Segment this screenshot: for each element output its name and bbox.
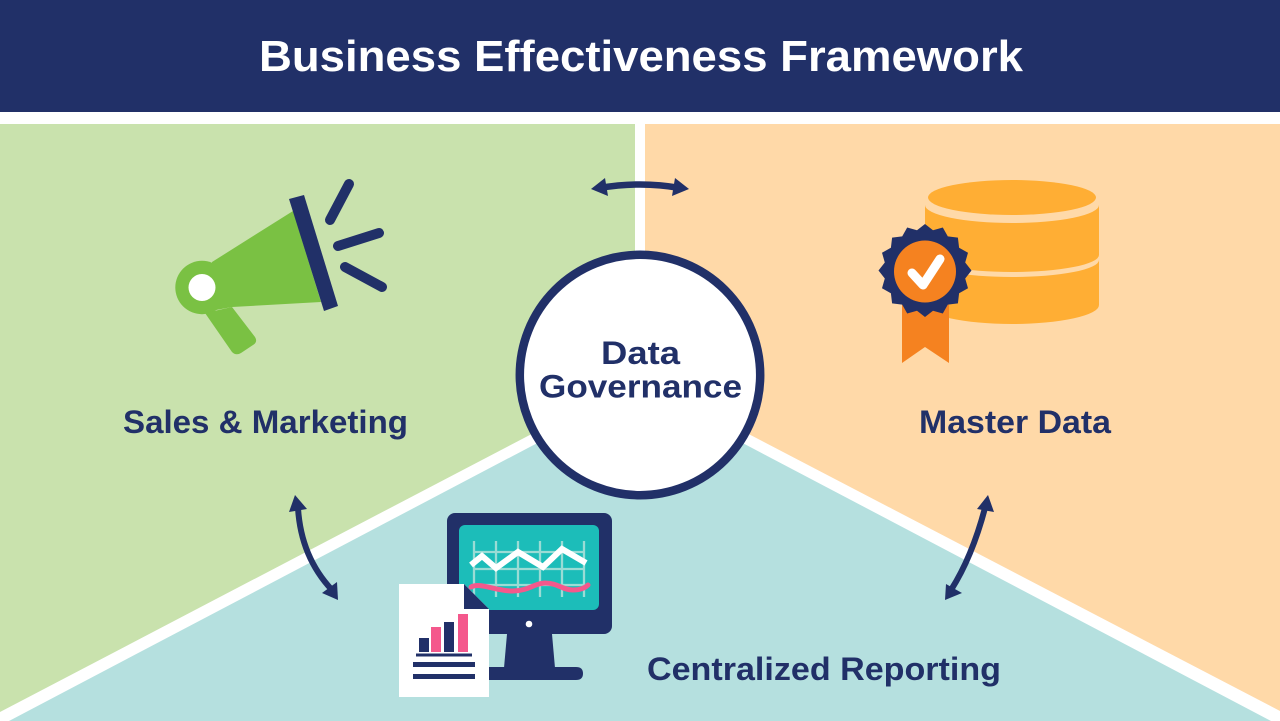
icon: megaphone: [175, 184, 382, 354]
panel: master data: [645, 124, 1280, 711]
center circle: data governance: [520, 255, 760, 495]
header bar: [0, 0, 1280, 112]
monitor: [447, 513, 612, 680]
panel: sales and marketing: [0, 124, 635, 712]
label: centralized reporting: Centralized Reporting: [647, 651, 1001, 687]
arrow: top double arrow: [591, 178, 689, 196]
report document: [399, 584, 489, 697]
title: Business Effectiveness Framework: [259, 32, 1024, 81]
label: master data: Master Data: [919, 404, 1111, 440]
label: sales and marketing: Sales & Marketing: [123, 404, 408, 440]
panel: centralized reporting: [9, 389, 1271, 721]
arrow: right double arrow: [945, 495, 994, 600]
icon: database with ribbon badge: [878, 180, 1099, 363]
icon: monitor with report: [399, 513, 612, 697]
arrow: left double arrow: [289, 495, 338, 600]
center circle: data governance: Governance: [539, 368, 742, 404]
center label: Data: [601, 335, 680, 371]
